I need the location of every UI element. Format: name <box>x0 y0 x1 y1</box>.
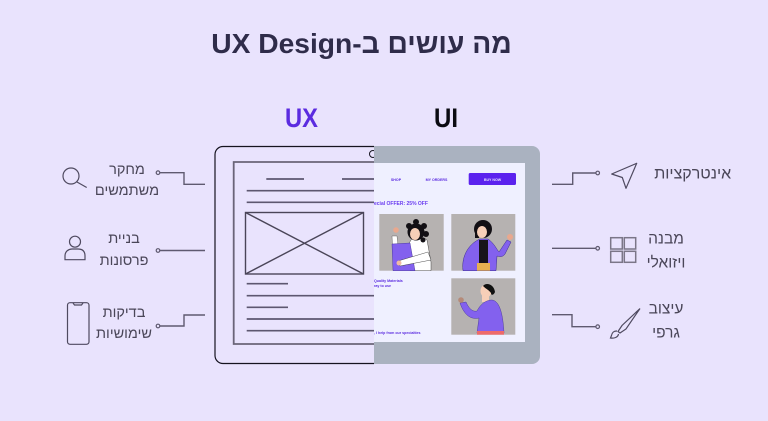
icon: paintbrush <box>610 308 640 338</box>
icon: person <box>65 236 85 260</box>
illustration: man in purple sweater <box>451 278 515 335</box>
label: usability tests <box>96 305 152 342</box>
label: usability tests: שימושיות <box>96 326 152 342</box>
label: visual structure <box>647 230 685 272</box>
product text: , I help from our specialties <box>374 331 421 335</box>
label: user research: מחקר <box>109 162 145 178</box>
connector: personas <box>156 249 205 252</box>
connector: interactions <box>552 171 600 184</box>
nav: my orders: MY ORDERS <box>426 178 448 182</box>
connector: visual structure <box>552 246 600 250</box>
icon: search <box>63 168 87 188</box>
illustration: woman with bag <box>379 214 444 271</box>
connector: usability <box>156 315 205 328</box>
label: user research <box>95 162 159 199</box>
label: visual structure: ויזואלי <box>647 254 685 272</box>
wireframe text lines <box>247 179 374 331</box>
button: buy now: BUY NOW <box>484 178 502 182</box>
label: graphic design: גרפי <box>652 324 680 342</box>
label: graphic design: עיצוב <box>649 300 683 318</box>
product text: Quality Materials <box>374 279 403 283</box>
product text: ray to use <box>374 284 391 288</box>
label: visual structure: מבנה <box>648 230 684 248</box>
label: interactions: אינטרקציות <box>654 166 731 182</box>
connector: graphic design <box>552 315 600 329</box>
connector: research <box>156 171 205 184</box>
icon: phone <box>68 303 89 344</box>
icon: grid <box>611 238 636 262</box>
panel: UI tablet <box>374 146 540 364</box>
wireframe image placeholder <box>246 212 364 274</box>
illustration: woman in purple jacket <box>451 214 515 271</box>
label: building personas <box>100 231 149 269</box>
icon: navigation arrow <box>612 163 637 188</box>
label: building personas: פרסונות <box>100 253 149 269</box>
label: building personas: בניית <box>108 231 140 247</box>
label: user research: משתמשים <box>95 183 159 199</box>
panel: UX wireframe tablet <box>215 146 376 364</box>
button: buy now <box>469 173 516 185</box>
heading: UI: UI <box>434 103 458 133</box>
nav: shop: SHOP <box>391 178 402 182</box>
offer text: ecial OFFER: 25% OFF <box>374 201 428 207</box>
label: graphic design <box>649 300 683 342</box>
heading: UX: UX <box>285 103 318 133</box>
product text <box>374 279 421 335</box>
label: usability tests: בדיקות <box>103 305 146 321</box>
title: מה עושים ב-UX Design <box>211 27 512 59</box>
